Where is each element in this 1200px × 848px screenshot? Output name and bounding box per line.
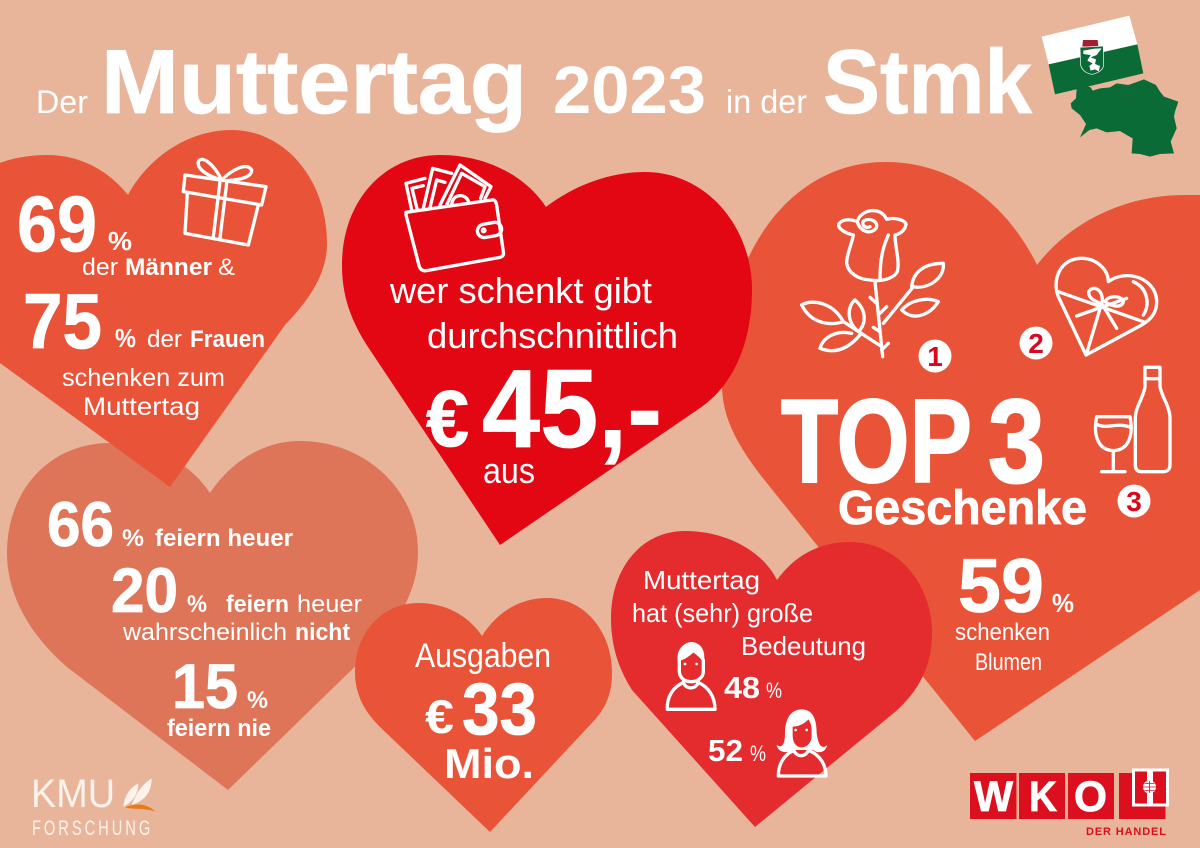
logo: KMU Forschung: FORSCHUNG [32,816,150,840]
text: Muttertag hat grosse Bedeutung: hat (sehr) große [632,598,813,628]
text: schenken zum Muttertag: Muttertag [83,393,200,421]
stat: 48 percent men: % [766,678,782,703]
logo: WKO Der Handel: W [974,773,1013,821]
stat: 59 percent flowers: schenken [955,619,1050,646]
stat: 15 percent never: % [247,687,268,714]
text: wer schenkt gibt durchschnittlich [389,270,678,356]
stat: 33 million euro: € [425,690,454,743]
stat: 52 percent women [708,733,766,768]
stat: 69 percent men: % [108,226,132,256]
heading: TOP 3 Geschenke [781,375,1087,535]
stat: 48 percent men: 48 [724,670,760,705]
stat: 59 percent flowers [955,544,1074,676]
stat: 66 percent celebrate: 66 [47,490,114,560]
title: Stmk [823,32,1032,133]
badge: rank 1: 1 [927,341,943,372]
title: in der [726,83,807,120]
title: Muttertag [101,32,527,133]
heading: TOP 3 Geschenke: 3 [988,375,1045,508]
stat: 66 percent celebrate: feiern heuer [155,525,293,552]
title: 2023 [553,53,706,128]
stat: 20 percent probably not: feiern [226,591,289,618]
panel: heart top 3 gifts [722,162,1200,741]
stat: 48 percent men [724,670,782,705]
heading: TOP 3 Geschenke: TOP [781,375,972,508]
logo: KMU Forschung: KMU [31,772,115,816]
text: Muttertag hat grosse Bedeutung: Muttertag [643,565,760,595]
stat: 69 percent men: Männer [125,254,212,281]
panel: heart importance [611,531,932,827]
icon: woman [777,709,827,776]
panel: heart expenses [355,598,612,832]
stat: 75 percent women: der [147,326,182,353]
badge: rank 3 [1118,484,1150,518]
icon: man [667,643,715,709]
icon: gift box [183,159,266,245]
stat: 20 percent probably not [111,556,362,646]
badge: rank 3: 3 [1126,486,1142,517]
text: wer schenkt gibt durchschnittlich: durchschnittlich [427,315,678,356]
stat: 69 percent men: der [82,254,118,281]
stat: 75 percent women: 75 [23,277,102,365]
panel: heart bottom-left [7,441,418,790]
stat: 75 percent women: % [115,323,136,353]
icon: rose [802,211,943,357]
stat: 59 percent flowers: % [1052,588,1074,618]
badge: rank 2 [1020,326,1052,360]
stat: 52 percent women: % [750,741,766,766]
stat: 45 euro: aus [483,450,535,491]
badge: rank 2: 2 [1028,328,1044,359]
stat: 69 percent men: 69 [17,179,97,268]
text: schenken zum Muttertag [62,364,225,421]
panel: heart center [342,155,752,545]
title: Der [36,84,88,120]
icon: wine bottle and glass [1096,367,1170,472]
text: Ausgaben: Ausgaben [415,637,551,675]
icon: wallet with money [406,165,504,271]
title [36,32,1032,133]
stat: 20 percent probably not: heuer [297,591,362,618]
text: schenken zum Muttertag: schenken zum [62,364,225,392]
logo: KMU Forschung [31,772,155,840]
logo: WKO Der Handel [970,770,1168,838]
stat: 15 percent never: 15 [172,652,238,722]
stat: 15 percent never [167,652,271,742]
icon: Styrian flag and map [1042,16,1178,157]
stat: 69 percent men [17,179,235,281]
text: Muttertag hat grosse Bedeutung: Bedeutung [741,631,866,661]
stat: 20 percent probably not: wahrscheinlich [122,619,287,646]
text: Muttertag hat grosse Bedeutung [632,565,866,661]
stat: 20 percent probably not: % [187,591,207,618]
stat: 15 percent never: feiern nie [167,715,271,742]
stat: 33 million euro [425,669,537,787]
stat: 66 percent celebrate [47,490,293,560]
logo: WKO Der Handel: O [1074,773,1107,821]
stat: 20 percent probably not: 20 [111,556,178,626]
text: wer schenkt gibt durchschnittlich: wer schenkt gibt [389,270,652,311]
panel: heart top-left [0,130,327,487]
stat: 45 euro [426,347,662,491]
stat: 45 euro: € [426,374,469,463]
stat: 69 percent men: & [218,254,235,281]
logo: WKO Der Handel: K [1029,773,1057,821]
stat: 45 euro: 45,- [482,347,662,471]
heading: TOP 3 Geschenke: Geschenke [838,482,1087,535]
stat: 66 percent celebrate: % [122,525,144,552]
stat: 20 percent probably not: nicht [295,619,350,646]
stat: 33 million euro: 33 [462,669,537,750]
stat: 75 percent women [23,277,265,365]
icon: heart gift box [1056,258,1157,355]
stat: 33 million euro: Mio. [444,740,534,787]
logo: WKO Der Handel: DER HANDEL [1086,826,1166,838]
stat: 75 percent women: Frauen [190,326,265,353]
stat: 59 percent flowers: 59 [958,544,1044,629]
stat: 59 percent flowers: Blumen [975,649,1042,676]
stat: 52 percent women: 52 [708,733,743,768]
badge: rank 1 [918,340,952,372]
